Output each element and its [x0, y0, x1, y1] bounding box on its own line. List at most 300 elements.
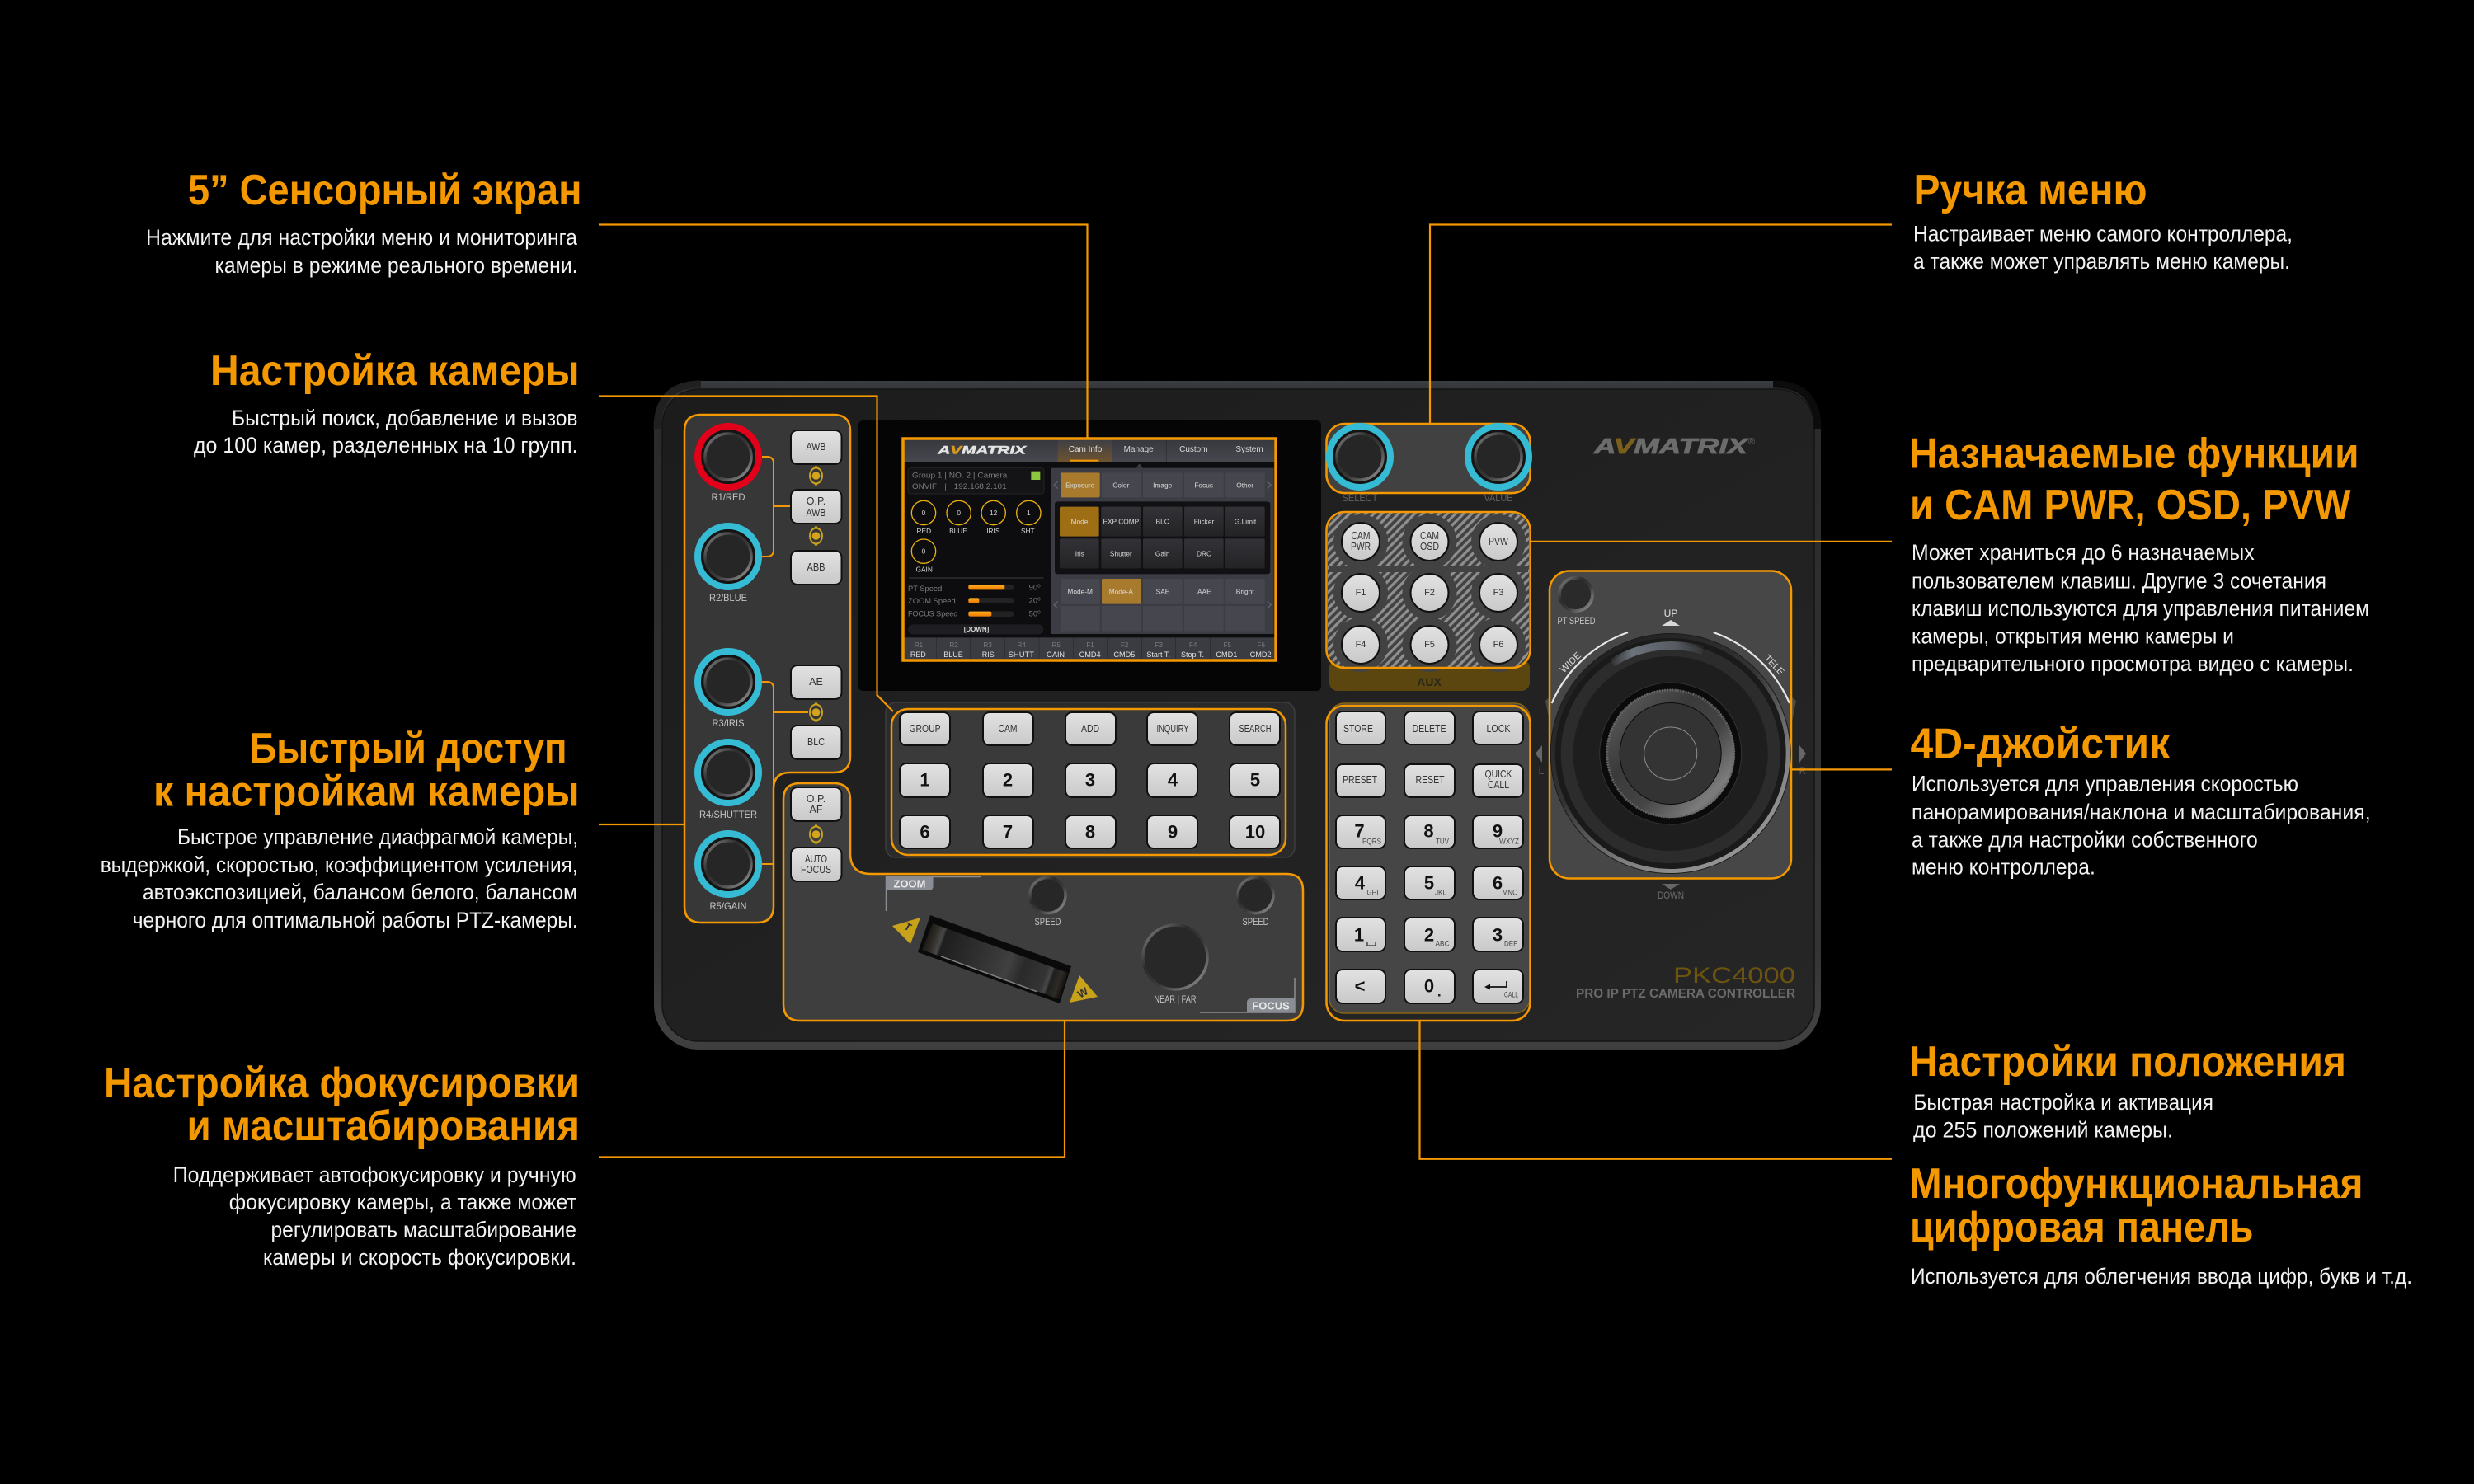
- heading: quick access: Быстрый доступ: [249, 725, 567, 773]
- heading: focus and zoom: Настройка фокусировки: [104, 1059, 580, 1107]
- key: enter call: CALL: [1504, 991, 1518, 999]
- key: CAM PWR: CAM: [1351, 530, 1371, 542]
- text: position settings: [1913, 1090, 2213, 1143]
- knob: R2 blue: R2/BLUE: [709, 592, 747, 603]
- key: SEARCH: SEARCH: [1239, 723, 1272, 735]
- key: 2: [983, 763, 1033, 797]
- key: ABB: [791, 551, 841, 585]
- key: 4: [1336, 866, 1385, 899]
- key: 8: [1404, 815, 1455, 848]
- speed sliders: 50⁰: [1029, 610, 1041, 618]
- key: F6: [1479, 626, 1517, 664]
- heading: assignable functions: Назначаемые функции: [1909, 430, 2359, 478]
- heading: numeric pad: [1909, 1160, 2363, 1252]
- exposure menu: DRC: [1197, 549, 1211, 557]
- key: F6: F6: [1493, 640, 1503, 650]
- screen contents: [904, 439, 1274, 659]
- key: DELETE: DELETE: [1412, 723, 1446, 735]
- key: 8: [1065, 815, 1116, 848]
- screen header: [904, 439, 1274, 462]
- function label bar: GAIN: [1047, 650, 1065, 659]
- key: 8: 8: [1423, 821, 1434, 841]
- key: 0: 0: [1424, 976, 1434, 996]
- key: 9: 9: [1493, 821, 1503, 841]
- key: 6: 6: [1493, 872, 1503, 894]
- key: 7: [983, 815, 1033, 848]
- key: F1: [1342, 574, 1380, 612]
- function label bar: CMD4: [1079, 650, 1101, 659]
- heading: position settings: Настройки положения: [1909, 1038, 2346, 1086]
- key: 5: 5: [1424, 872, 1434, 894]
- key: F4: F4: [1356, 640, 1366, 650]
- gauges: SHT: [1021, 527, 1035, 535]
- key: LOCK: LOCK: [1486, 723, 1511, 735]
- icon: AWB dial: [810, 465, 822, 486]
- key: INQUIRY: INQUIRY: [1156, 723, 1189, 735]
- speed sliders: 90⁰: [1029, 583, 1041, 591]
- knob: zoom speed: SPEED: [1034, 916, 1061, 928]
- text: assignable functions: клавиш используются для управления питанием: [1912, 596, 2369, 621]
- exposure menu: Iris: [1075, 549, 1084, 557]
- key: F2: F2: [1424, 588, 1435, 598]
- knob: R4 shutter: R4/SHUTTER: [699, 809, 757, 820]
- touch screen: [903, 439, 1276, 660]
- tag: FOCUS: [1200, 978, 1295, 1012]
- key: CAM: [983, 712, 1033, 745]
- zoom rocker: T: [902, 920, 914, 934]
- key: F4: [1342, 626, 1380, 664]
- exposure menu: Focus: [1194, 481, 1213, 489]
- zoom rocker: W: [1075, 984, 1091, 1001]
- gauges: [911, 500, 1041, 574]
- gauges: BLUE: [949, 527, 967, 535]
- speed sliders: FOCUS Speed: [908, 610, 957, 618]
- key: 1: [1336, 918, 1385, 951]
- function label bar: [904, 637, 1274, 659]
- key: 1: 1: [1354, 925, 1364, 945]
- key: CAM: CAM: [998, 723, 1018, 735]
- panel: screen bezel: [858, 420, 1321, 691]
- knob: R4 shutter: [698, 742, 759, 820]
- model name: PKC4000: [1673, 963, 1795, 988]
- function label bar: Stop T.: [1181, 650, 1204, 659]
- key: CAM OSD: [1410, 523, 1448, 561]
- camera info box: [908, 468, 1044, 494]
- key: 6: 6: [920, 821, 930, 843]
- function label bar: F4: [1189, 641, 1197, 649]
- panel: 4D joystick: [1536, 571, 1807, 901]
- key: 4: 4: [1168, 770, 1178, 790]
- key: 7: 7: [1354, 821, 1365, 841]
- key: AWB: AWB: [807, 441, 826, 453]
- leader line: camera setup: [599, 396, 893, 711]
- knob: select: SELECT: [1343, 492, 1378, 504]
- key: RESET: [1404, 764, 1455, 797]
- key: 3: [1473, 918, 1523, 951]
- camera info box: Group 1 | NO. 2 | Camera: [912, 472, 1008, 480]
- key: CAM OSD: CAM: [1420, 530, 1439, 542]
- text: assignable functions: [1912, 540, 2369, 676]
- key: RESET: RESET: [1415, 774, 1445, 786]
- knob: zoom speed: [1030, 877, 1065, 928]
- leader line: joystick: [1791, 768, 1892, 771]
- heading: assignable functions: [1909, 430, 2359, 529]
- leader line: touch screen: [599, 224, 1087, 439]
- key: INQUIRY: [1147, 712, 1197, 745]
- key: 9: [1147, 815, 1197, 848]
- key: BLC: [791, 726, 841, 759]
- key: enter call: [1473, 970, 1523, 1003]
- key: 4: [1147, 763, 1197, 797]
- key: 2: [1404, 918, 1455, 951]
- text: menu knob: а также может управлять меню камеры.: [1913, 249, 2290, 274]
- speed sliders: ZOOM Speed: [908, 597, 956, 605]
- function label bar: Start T.: [1146, 650, 1170, 659]
- function label bar: R3: [984, 641, 992, 649]
- text: quick access: [101, 824, 578, 932]
- key: 10: [1230, 815, 1280, 848]
- exposure menu: Exposure: [1065, 481, 1095, 489]
- text: focus and zoom: регулировать масштабирование: [270, 1218, 576, 1242]
- heading: focus and zoom: и масштабирования: [186, 1102, 580, 1150]
- key: 6: MNO: [1503, 889, 1517, 897]
- leader line: assignable keys: [1531, 541, 1892, 542]
- text: quick access: черного для оптимальной работы PTZ-камеры.: [133, 908, 578, 932]
- heading: camera setup: Настройка камеры: [210, 347, 579, 395]
- knob: R3 iris: [698, 651, 759, 729]
- heading: assignable functions: и CAM PWR, OSD, PVW: [1910, 481, 2351, 529]
- key: SEARCH: [1230, 712, 1280, 745]
- text: numeric pad: Используется для облегчения ввода цифр, букв и т.д.: [1911, 1264, 2412, 1289]
- label: TELE: TELE: [1762, 653, 1786, 678]
- key: 6: [900, 815, 950, 848]
- text: quick access: автоэкспозицией, балансом белого, балансом: [143, 880, 577, 904]
- text: quick access: выдержкой, скоростью, коэффициентом усиления,: [101, 852, 578, 877]
- key: LOCK: [1473, 711, 1523, 744]
- key: 2: 2: [1424, 925, 1434, 945]
- key: 9: [1473, 815, 1523, 848]
- key: back: <: [1355, 976, 1365, 996]
- exposure menu: Other: [1236, 481, 1253, 489]
- key: O.P. AWB: [791, 490, 841, 524]
- key: CAM PWR: PWR: [1351, 541, 1371, 552]
- exposure menu: [1051, 463, 1274, 634]
- camera info box: |: [944, 482, 947, 491]
- key: ABB: ABB: [807, 561, 825, 573]
- tag: ZOOM: ZOOM: [894, 877, 925, 890]
- key: AUTO FOCUS: AUTO: [805, 853, 827, 865]
- heading: quick access: [153, 725, 579, 816]
- key: BLC: BLC: [807, 736, 825, 748]
- leader line: quick access: [599, 824, 684, 825]
- function label bar: CMD5: [1113, 650, 1135, 659]
- model name: [1576, 963, 1795, 1001]
- function label bar: SHUTT: [1009, 650, 1035, 659]
- icon: AF dial: [810, 824, 822, 845]
- text: menu knob: [1913, 221, 2293, 274]
- screen header: System: [1235, 445, 1263, 454]
- heading: quick access: к настройкам камеры: [153, 768, 579, 816]
- key: 5: 5: [1250, 770, 1260, 790]
- key: 0: [1404, 970, 1455, 1003]
- key: F5: [1410, 626, 1448, 664]
- joystick wheel: [1550, 632, 1791, 874]
- gauges: GAIN: [915, 566, 933, 574]
- label: DOWN: DOWN: [1658, 890, 1684, 901]
- function label bar: R1: [915, 641, 924, 649]
- key: O.P. AWB: AWB: [807, 507, 826, 519]
- panel: quick access knobs and keys: [684, 415, 850, 923]
- tag: FOCUS: FOCUS: [1252, 999, 1290, 1012]
- key: QUICK CALL: [1473, 764, 1523, 797]
- panel: AUX assignable keys: AUX: [1417, 675, 1442, 688]
- text: position settings: до 255 положений камеры.: [1913, 1118, 2173, 1143]
- key: 5: JKL: [1435, 889, 1446, 897]
- speed sliders: 20⁰: [1029, 596, 1041, 604]
- function label bar: RED: [910, 650, 926, 659]
- key: 2: 2: [1003, 770, 1013, 790]
- gauges: 0: [922, 547, 926, 556]
- icon: AE dial: [810, 702, 822, 723]
- down status: [DOWN]: [964, 626, 990, 633]
- key: PRESET: [1336, 764, 1385, 797]
- speed sliders: PT Speed: [908, 585, 942, 593]
- function label bar: F6: [1258, 641, 1266, 649]
- icon: ABB dial: [810, 525, 822, 547]
- model name: PRO IP PTZ CAMERA CONTROLLER: [1576, 987, 1795, 1001]
- text: assignable functions: пользователем клавиш. Другие 3 сочетания: [1912, 569, 2326, 594]
- screen header: Cam Info: [1069, 445, 1103, 454]
- key: 9: WXYZ: [1499, 838, 1519, 846]
- function label bar: IRIS: [980, 650, 995, 659]
- knob: R1 red: [698, 426, 759, 503]
- knob: R3 iris: R3/IRIS: [713, 717, 744, 729]
- key: 4: 4: [1355, 872, 1366, 894]
- knob: PT speed: [1557, 578, 1596, 627]
- knob: near far: NEAR | FAR: [1155, 993, 1197, 1005]
- function label bar: R5: [1052, 641, 1061, 649]
- knob: PT speed: PT SPEED: [1557, 615, 1596, 627]
- key: STORE: [1336, 711, 1385, 744]
- key: CAM OSD: OSD: [1420, 541, 1439, 552]
- exposure menu: Mode-A: [1109, 588, 1133, 596]
- key: 3: 3: [1493, 925, 1503, 945]
- key: PVW: [1479, 523, 1517, 561]
- heading: focus and zoom: [104, 1059, 580, 1150]
- knob: value: [1468, 426, 1529, 504]
- label: R: R: [1799, 765, 1807, 777]
- key: AE: AE: [809, 676, 823, 688]
- knob: R2 blue: [698, 526, 759, 603]
- screen header: Manage: [1124, 445, 1154, 454]
- exposure menu: BLC: [1156, 518, 1169, 526]
- text: focus and zoom: фокусировку камеры, а также может: [229, 1190, 576, 1214]
- text: touch screen: Нажмите для настройки меню и мониторинга: [146, 225, 578, 250]
- key: AUTO FOCUS: FOCUS: [801, 864, 831, 876]
- key: DELETE: [1404, 711, 1455, 744]
- knob: select: [1329, 426, 1390, 504]
- key: 8: TUV: [1436, 838, 1450, 846]
- text: joystick: Используется для управления скоростью: [1912, 772, 2298, 796]
- exposure menu: SAE: [1156, 588, 1170, 596]
- text: focus and zoom: камеры и скорость фокусировки.: [263, 1245, 576, 1270]
- text: joystick: [1912, 772, 2371, 879]
- device body: [654, 381, 1821, 1050]
- leader line: numeric pad: [1420, 1021, 1892, 1159]
- key: AUTO FOCUS: [791, 848, 841, 881]
- leader line: menu knob: [1430, 224, 1892, 424]
- function label bar: F2: [1121, 641, 1129, 649]
- key: 3: [1065, 763, 1116, 797]
- text: assignable functions: камеры, открытия меню камеры и: [1912, 623, 2234, 648]
- knob: focus speed: [1238, 877, 1273, 928]
- exposure menu: Mode: [1071, 518, 1089, 526]
- heading: numeric pad: цифровая панель: [1910, 1204, 2253, 1252]
- text: quick access: Быстрое управление диафрагмой камеры,: [177, 824, 578, 849]
- label: WIDE: WIDE: [1559, 650, 1583, 675]
- exposure menu: EXP COMP: [1103, 518, 1140, 526]
- text: focus and zoom: Поддерживает автофокусировку и ручную: [173, 1162, 576, 1187]
- exposure menu: Image: [1153, 481, 1173, 489]
- key: F1: F1: [1356, 588, 1366, 598]
- knob: R5 gain: [698, 834, 759, 912]
- text: joystick: панорамирования/наклона и масштабирования,: [1912, 800, 2371, 824]
- key: 9: 9: [1168, 821, 1178, 843]
- panel: camera keypad: [886, 702, 1295, 857]
- gauges: IRIS: [986, 527, 1000, 535]
- gauges: 0: [922, 509, 926, 517]
- camera info box: ONVIF: [912, 482, 937, 491]
- screen header: AVMATRIX: [937, 443, 1028, 456]
- key: 5: [1230, 763, 1280, 797]
- text: camera setup: [194, 406, 577, 458]
- exposure menu: Color: [1112, 481, 1130, 489]
- knob: value: VALUE: [1484, 492, 1512, 504]
- text: camera setup: до 100 камер, разделенных на 10 групп.: [194, 433, 577, 458]
- label: L: [1536, 745, 1545, 777]
- exposure menu: Flicker: [1194, 518, 1214, 526]
- camera info box: 192.168.2.101: [954, 482, 1007, 491]
- knob: focus speed: SPEED: [1242, 916, 1269, 928]
- label: DOWN: [1658, 884, 1684, 901]
- key: QUICK CALL: CALL: [1488, 779, 1509, 791]
- key: CAM PWR: [1342, 523, 1380, 561]
- key: 6: [1473, 866, 1523, 899]
- key: 1: 1: [920, 770, 930, 790]
- label: R: [1799, 745, 1807, 777]
- key: ADD: ADD: [1081, 723, 1099, 735]
- key: 4: GHI: [1367, 889, 1379, 897]
- label: UP: [1662, 608, 1680, 626]
- panel: AUX assignable keys: [1326, 512, 1531, 691]
- heading: menu knob: Ручка меню: [1913, 167, 2147, 214]
- exposure menu: Bright: [1236, 588, 1254, 596]
- brand logo: ®: [1748, 437, 1755, 447]
- knob: near far: [1143, 925, 1207, 1005]
- key: O.P. AF: [791, 787, 841, 821]
- exposure menu: Gain: [1155, 549, 1170, 557]
- key: F3: [1479, 574, 1517, 612]
- function label bar: F5: [1224, 641, 1232, 649]
- zoom rocker: [892, 915, 1098, 1003]
- key: O.P. AWB: O.P.: [807, 495, 825, 507]
- key: ADD: [1065, 712, 1116, 745]
- key: QUICK CALL: QUICK: [1484, 768, 1512, 780]
- text: joystick: а также для настройки собственного: [1912, 828, 2258, 852]
- heading: touch screen: 5” Сенсорный экран: [188, 167, 582, 214]
- function label bar: CMD2: [1250, 650, 1272, 659]
- heading: numeric pad: Многофункциональная: [1909, 1160, 2363, 1208]
- speed sliders: [908, 577, 1043, 618]
- function label bar: F3: [1155, 641, 1164, 649]
- function label bar: BLUE: [943, 650, 963, 659]
- key: PVW: PVW: [1489, 536, 1508, 547]
- screen header: Custom: [1179, 445, 1208, 454]
- key: 5: [1404, 866, 1455, 899]
- gauges: 1: [1027, 509, 1031, 517]
- key: 2: ABC: [1435, 940, 1450, 948]
- text: menu knob: Настраивает меню самого контроллера,: [1913, 221, 2293, 246]
- key: 7: [1336, 815, 1385, 848]
- key: 1: [900, 763, 950, 797]
- key: F5: F5: [1424, 640, 1435, 650]
- gauges: 12: [990, 509, 998, 517]
- panel: menu knobs: [1326, 424, 1531, 504]
- label: UP: UP: [1664, 608, 1677, 619]
- key: F3: F3: [1493, 588, 1503, 598]
- function label bar: R4: [1018, 641, 1026, 649]
- text: touch screen: [146, 225, 578, 278]
- exposure menu: Mode-M: [1067, 588, 1093, 596]
- text: joystick: меню контроллера.: [1912, 854, 2095, 879]
- key: O.P. AF: O.P.: [807, 793, 825, 805]
- panel: numeric keypad: [1326, 703, 1531, 1021]
- key: PRESET: PRESET: [1343, 774, 1377, 786]
- tag: ZOOM: [886, 876, 981, 911]
- heading: joystick: 4D-джойстик: [1910, 721, 2171, 768]
- gauges: RED: [917, 527, 931, 535]
- function label bar: CMD1: [1216, 650, 1237, 659]
- function label bar: F1: [1086, 641, 1094, 649]
- key: 3: DEF: [1504, 940, 1517, 948]
- key: AE: [791, 665, 841, 699]
- key: 7: PQRS: [1362, 838, 1381, 846]
- key: 3: 3: [1085, 770, 1095, 790]
- label: L: L: [1539, 765, 1545, 777]
- key: back: [1336, 970, 1385, 1003]
- key: O.P. AF: AF: [810, 804, 823, 815]
- down status: [908, 624, 1043, 634]
- gauges: 0: [957, 509, 961, 517]
- knob: R1 red: R1/RED: [711, 491, 745, 503]
- text: assignable functions: предварительного просмотра видео с камеры.: [1912, 651, 2354, 676]
- text: camera setup: Быстрый поиск, добавление и вызов: [232, 406, 577, 430]
- key: F2: [1410, 574, 1448, 612]
- key: GROUP: GROUP: [909, 723, 940, 735]
- key: STORE: STORE: [1343, 723, 1373, 735]
- knob: R5 gain: R5/GAIN: [709, 900, 747, 912]
- key: GROUP: [900, 712, 950, 745]
- leader line: focus and zoom: [599, 1021, 1065, 1158]
- text: assignable functions: Может храниться до 6 назначаемых: [1912, 540, 2255, 565]
- text: touch screen: камеры в режиме реального времени.: [214, 253, 577, 278]
- key: 10: 10: [1245, 821, 1265, 843]
- panel: focus and zoom: [783, 783, 1303, 1021]
- exposure menu: Shutter: [1110, 549, 1132, 557]
- key: 7: 7: [1003, 821, 1013, 843]
- text: focus and zoom: [173, 1162, 576, 1270]
- function label bar: R2: [950, 641, 958, 649]
